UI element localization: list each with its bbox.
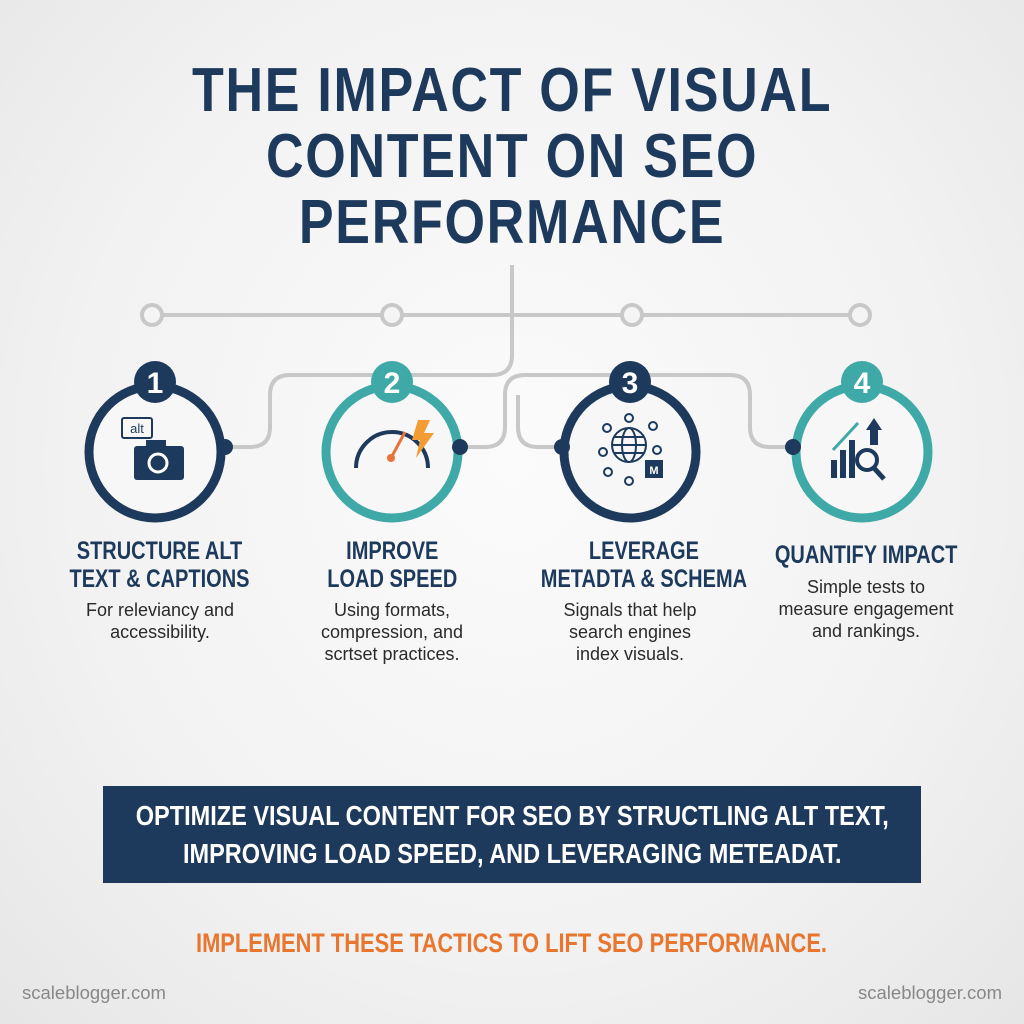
step 3 text: METADTA & SCHEMA xyxy=(541,565,747,593)
step 3 text: search engines xyxy=(569,622,691,642)
step 2 text: IMPROVE xyxy=(346,537,438,565)
step 4 text: and rankings. xyxy=(812,621,920,641)
step 4 text: Simple tests to xyxy=(807,577,925,597)
footer right: scaleblogger.com xyxy=(858,982,1002,1003)
summary banner xyxy=(103,786,921,883)
icon: speedometer xyxy=(356,420,434,468)
call to action: IMPLEMENT THESE TACTICS TO LIFT SEO PERFORMANCE. xyxy=(196,928,828,958)
summary banner: OPTIMIZE VISUAL CONTENT FOR SEO BY STRUCTLING ALT TEXT, xyxy=(135,800,889,830)
step 2 text: Using formats, xyxy=(334,600,450,620)
step 2 text: LOAD SPEED xyxy=(327,565,457,593)
step 2 text: compression, and xyxy=(321,622,463,642)
step 1 text: accessibility. xyxy=(110,622,210,642)
step 1 text: For releviancy and xyxy=(86,600,234,620)
title: PERFORMANCE xyxy=(299,188,725,257)
step 3 text: Signals that help xyxy=(563,600,697,620)
icon: globe network xyxy=(599,414,662,485)
step 4 text: QUANTIFY IMPACT xyxy=(775,541,957,569)
step 1 circle: 1 xyxy=(147,367,163,400)
step 4 text: measure engagement xyxy=(778,599,954,619)
step 3 text: index visuals. xyxy=(576,644,684,664)
icon: alt camera xyxy=(122,418,184,480)
title: CONTENT ON SEO xyxy=(266,122,758,191)
title xyxy=(192,56,832,257)
step 3 text: LEVERAGE xyxy=(589,537,699,565)
timeline diagram xyxy=(84,265,932,522)
step 1 text xyxy=(70,537,250,642)
step 3 circle xyxy=(554,361,696,518)
step 2 circle xyxy=(326,361,468,518)
step 3 text xyxy=(541,537,747,664)
step 1 circle xyxy=(89,361,233,518)
footer left: scaleblogger.com xyxy=(22,982,166,1003)
step 4 circle: 4 xyxy=(854,367,871,400)
step 2 circle: 2 xyxy=(384,367,400,400)
step 3 circle: 3 xyxy=(622,367,638,400)
step 2 text: scrtset practices. xyxy=(324,644,460,664)
step 4 text xyxy=(775,541,958,641)
step 3 circle: M xyxy=(649,465,659,477)
step 2 text xyxy=(321,537,463,664)
step 1 text: STRUCTURE ALT xyxy=(77,537,243,565)
title: THE IMPACT OF VISUAL xyxy=(192,56,832,125)
step 1 text: TEXT & CAPTIONS xyxy=(70,565,250,593)
icon: chart magnifier xyxy=(831,418,884,479)
summary banner: IMPROVING LOAD SPEED, AND LEVERAGING METEADAT. xyxy=(183,838,841,868)
icon: alt camera: alt xyxy=(130,421,144,436)
step 4 circle xyxy=(785,361,928,518)
